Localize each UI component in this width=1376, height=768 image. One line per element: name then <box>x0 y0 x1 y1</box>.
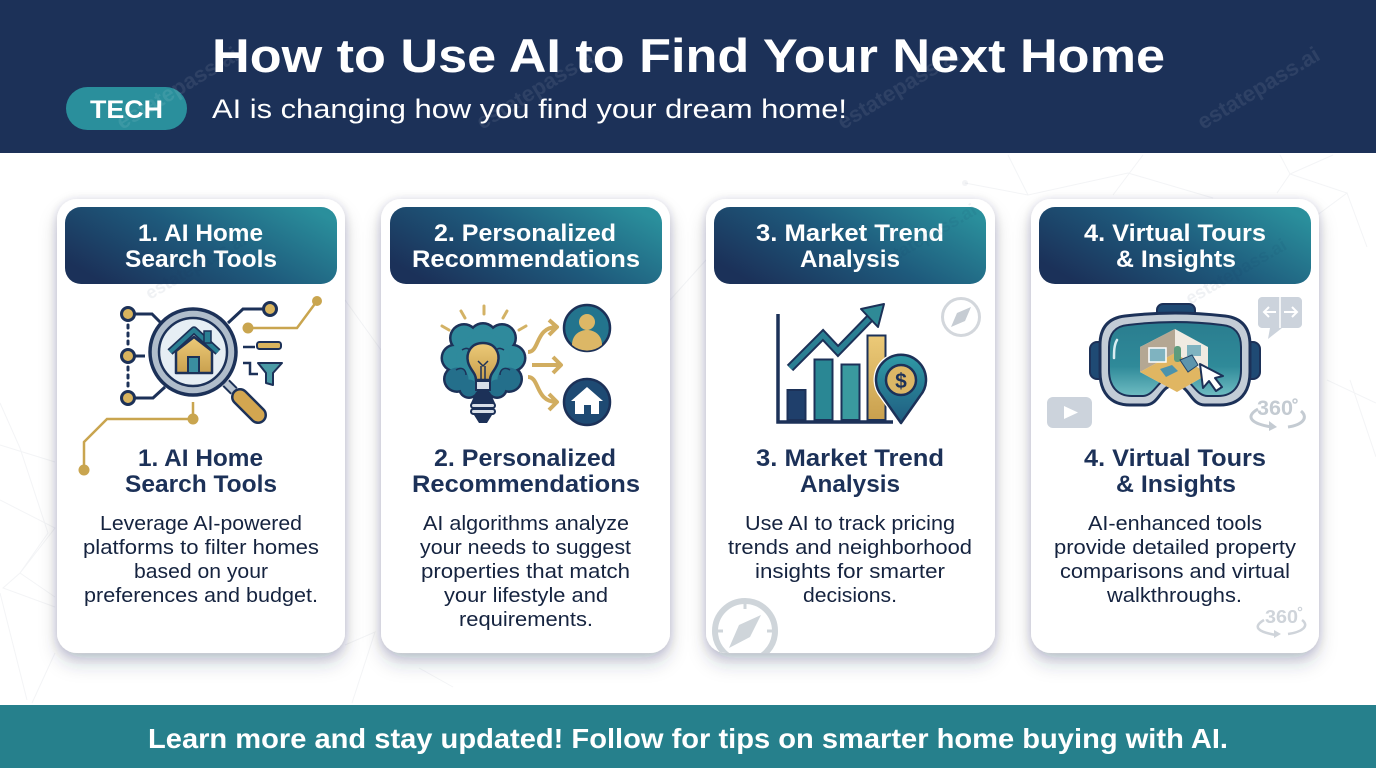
card description: AI algorithms analyze <box>423 513 629 535</box>
icon: 360 view small: 360 <box>1265 607 1298 627</box>
panel heading: 4. Virtual Tours <box>1084 220 1266 247</box>
card description: properties that match <box>421 561 630 583</box>
background network pattern <box>0 155 1376 703</box>
icon: bar chart with trend arrow and price pin: $ <box>895 370 907 393</box>
panel heading: 2. Personalized <box>434 220 616 247</box>
card description: preferences and budget. <box>84 585 318 607</box>
icon: compass top <box>942 298 980 336</box>
panel heading: Recommendations <box>412 246 640 273</box>
card title: Analysis <box>800 471 900 498</box>
card description: trends and neighborhood <box>728 537 972 559</box>
panel heading: & Insights <box>1116 246 1236 273</box>
card description <box>728 513 972 607</box>
icon: 360 view: 360 <box>1257 397 1293 420</box>
card description: requirements. <box>459 609 593 631</box>
card description <box>1054 513 1296 607</box>
tag: TECH: TECH <box>90 96 163 124</box>
icon: VR headset with room <box>1090 304 1260 405</box>
tag: TECH <box>66 87 187 130</box>
title: How to Use AI to Find Your Next Home <box>212 29 1165 82</box>
icon: compass bottom <box>715 601 775 661</box>
watermarks: estatepass.ai <box>472 42 603 134</box>
card description: based on your <box>134 561 268 583</box>
watermarks: estatepass.ai <box>1193 42 1324 134</box>
footer banner <box>0 705 1376 768</box>
panel heading: 1. AI Home <box>138 220 263 247</box>
panel heading: Search Tools <box>125 246 277 273</box>
card title: Recommendations <box>412 471 640 498</box>
card description: Use AI to track pricing <box>745 513 955 535</box>
card title <box>125 445 277 498</box>
card watermarks <box>142 200 1290 308</box>
panel: AI Home Search Tools <box>57 199 345 653</box>
card watermarks: estatepass.ai <box>1182 235 1290 308</box>
card title: & Insights <box>1116 471 1236 498</box>
card description: decisions. <box>803 585 897 607</box>
panel heading: 3. Market Trend <box>756 220 944 247</box>
card description: provide detailed property <box>1054 537 1296 559</box>
panel heading <box>390 207 662 284</box>
header banner <box>0 0 1376 153</box>
icon: 360 view small <box>1258 607 1305 638</box>
panel: Market Trend Analysis <box>706 199 995 661</box>
card title <box>1084 445 1266 498</box>
card description: platforms to filter homes <box>83 537 319 559</box>
icon: bar chart with trend arrow and price pin <box>778 304 926 423</box>
panel heading <box>714 207 986 284</box>
icon: video play <box>1047 397 1092 428</box>
card description: your lifestyle and <box>444 585 608 607</box>
card description: walkthroughs. <box>1106 585 1242 607</box>
card watermarks: estatepass.ai <box>142 230 250 303</box>
watermarks <box>112 42 1324 134</box>
card title <box>756 445 944 498</box>
card title: 2. Personalized <box>434 445 616 472</box>
card description <box>83 513 319 607</box>
card title: 1. AI Home <box>138 445 263 472</box>
card description: insights for smarter <box>755 561 945 583</box>
subtitle: AI is changing how you find your dream home! <box>212 94 847 124</box>
icon: brain lightbulb with arrows <box>440 305 610 425</box>
panel heading: Analysis <box>800 246 900 273</box>
icon: compare speech bubble <box>1258 297 1302 339</box>
card description: your needs to suggest <box>420 537 631 559</box>
panel: Personalized Recommendations <box>381 199 670 653</box>
panel: Virtual Tours and Insights <box>1031 199 1319 653</box>
card title <box>412 445 640 498</box>
card title: 3. Market Trend <box>756 445 944 472</box>
card title: Search Tools <box>125 471 277 498</box>
panel heading <box>1039 207 1311 284</box>
icon: magnifier over house with network <box>78 296 322 476</box>
footer banner: Learn more and stay updated! Follow for tips on smarter home buying with AI. <box>148 723 1228 754</box>
card description <box>420 513 631 631</box>
card title: 4. Virtual Tours <box>1084 445 1266 472</box>
panel heading <box>65 207 337 284</box>
card description: comparisons and virtual <box>1060 561 1290 583</box>
card watermarks: estatepass.ai <box>872 200 980 273</box>
icon: 360 view <box>1251 397 1304 431</box>
card description: Leverage AI-powered <box>100 513 302 535</box>
watermarks: estatepass.ai <box>833 42 964 134</box>
card description: AI-enhanced tools <box>1088 513 1262 535</box>
watermarks: estatepass.ai <box>112 42 243 134</box>
